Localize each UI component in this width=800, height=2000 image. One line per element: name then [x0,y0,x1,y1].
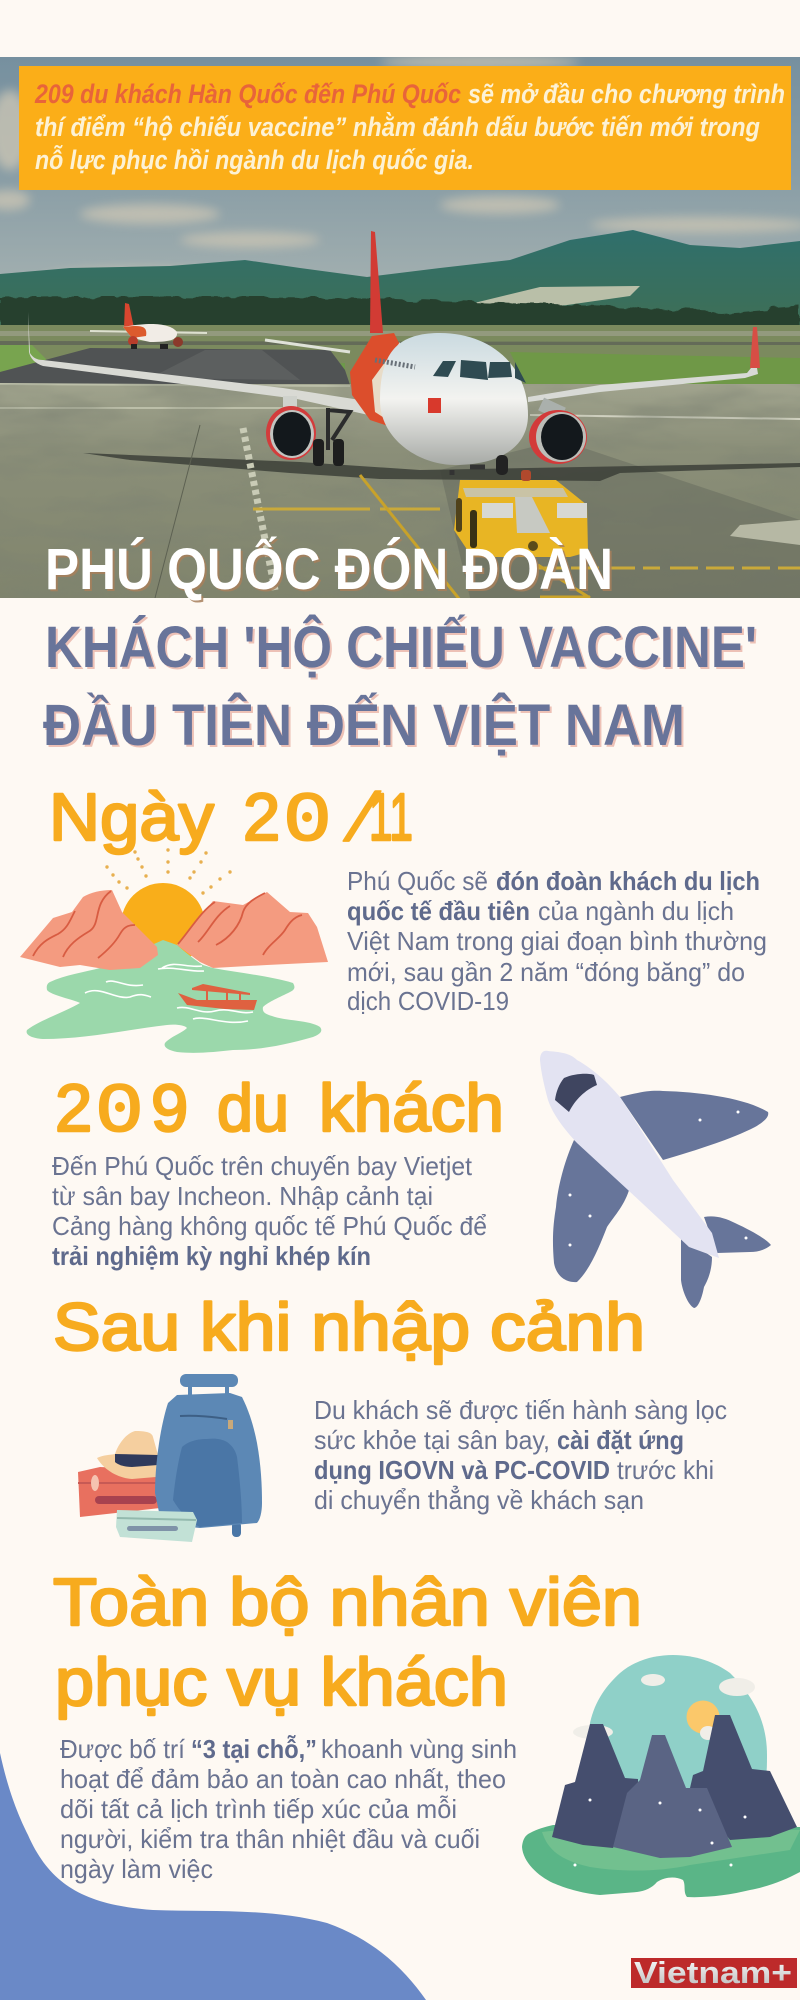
clouds [573,1674,755,1740]
title: ĐẦU TIÊN ĐẾN VIỆT NAM [43,693,685,758]
mountain creases [33,891,302,958]
sun rays [105,848,232,895]
text block: Sau khi nhập cảnh: cài đặt ứng [557,1425,684,1455]
heading: Ngày 20/11 [49,779,413,855]
water [27,940,321,1053]
red suitcase [78,1467,160,1517]
text block: Ngày 20/11: quốc tế đầu tiên [347,896,530,926]
cockpit window [555,1074,597,1112]
text block: Sau khi nhập cảnh: di chuyển thẳng về khách sạn [314,1484,644,1515]
engine left [266,396,316,460]
text block: Toàn bộ nhân viên: người, kiểm tra thân nhiệt đầu và cuối [60,1824,480,1854]
text block: Sau khi nhập cảnh: trước khi [617,1455,714,1485]
text block: Sau khi nhập cảnh: sức khỏe tại sân bay, [314,1425,550,1455]
text block: Toàn bộ nhân viên [60,1734,517,1884]
text block: Toàn bộ nhân viên: “3 tại chỗ,” [191,1734,317,1764]
icon: airplane illustration [540,1051,771,1308]
text block: Sau khi nhập cảnh: dụng IGOVN và PC-COVID [314,1455,610,1485]
photo: airplane on the Phu Quoc runway [0,55,800,600]
text block: Sau khi nhập cảnh [314,1395,727,1515]
right peak [690,1715,797,1840]
heading: Ngày 20/11: 11 [369,780,413,855]
heading: Ngày 20/11: / [339,779,386,855]
stars [568,1110,748,1246]
text block: Ngày 20/11: Phú Quốc sẽ [347,866,488,896]
base highlight [542,1825,800,1871]
text block: 209 du khách: Đến Phú Quốc trên chuyến bay Vietjet [52,1151,473,1181]
text block: Toàn bộ nhân viên: dõi tất cả lịch trình tiếp xúc của mỗi [60,1794,457,1824]
right wing [620,1091,768,1160]
text block: 209 du khách: Cảng hàng không quốc tế Phú Quốc để [52,1211,487,1241]
heading: 209 du khách: 2 [55,1071,92,1146]
landing gear [313,408,350,466]
small green case [116,1510,197,1542]
sun [686,1700,720,1734]
heading: Toàn bộ nhân viên phục vụ khách [53,1565,642,1720]
left tail [681,1235,712,1308]
text block: Toàn bộ nhân viên: ngày làm việc [60,1854,213,1884]
left mountain [20,890,158,970]
blue decorative blob [0,1753,426,2000]
heading: Sau khi nhập cảnh: Sau khi nhập cảnh [53,1290,645,1365]
waves [85,964,253,1022]
heading: Ngày 20/11: 0 [285,779,330,854]
callout box: introduction: 209 du khách Hàn Quốc đến Phú Quốc [34,79,461,109]
heading: 209 du khách: khách [319,1071,504,1146]
text block: 209 du khách: từ sân bay Incheon. Nhập cảnh tại [52,1181,433,1211]
middle peak [613,1735,732,1858]
text block: 209 du khách [52,1151,487,1271]
heading: Ngày 20/11: 2 [243,780,280,855]
heading: Toàn bộ nhân viên phục vụ khách: phục vụ khách [55,1645,508,1720]
title: ĐẦU TIÊN ĐẾN VIỆT NAM [45,695,687,760]
straw hat [97,1431,158,1479]
text block: Toàn bộ nhân viên: hoạt để đảm bảo an toàn cao nhất, theo [60,1764,506,1794]
title [43,537,759,760]
blue suitcase [155,1374,262,1537]
right mountain [177,892,328,968]
text block: Ngày 20/11: dịch COVID-19 [347,986,509,1016]
heading: 209 du khách: 0 [97,1070,142,1145]
sky egg [590,1655,767,1815]
text block: Toàn bộ nhân viên: khoanh vùng sinh [321,1734,517,1764]
icon: luggage [78,1374,262,1542]
text block: Sau khi nhập cảnh: Du khách sẽ được tiến hành sàng lọc [314,1395,727,1425]
sun [121,883,205,967]
stars [574,1798,746,1866]
text block: Ngày 20/11: của ngành du lịch [538,896,734,926]
yellow towing tractor [454,470,588,557]
heading: 209 du khách: 9 [151,1071,188,1146]
engine right [529,398,587,464]
left wing [553,1140,630,1282]
callout box: introduction: nỗ lực phục hồi ngành du lịch quốc gia. [35,144,474,175]
title: PHÚ QUỐC ĐÓN ĐOÀN [45,537,613,602]
title: PHÚ QUỐC ĐÓN ĐOÀN [47,539,615,604]
left peak [552,1724,638,1848]
text block: Ngày 20/11: đón đoàn khách du lịch [496,866,760,896]
heading: Toàn bộ nhân viên phục vụ khách: Toàn bộ nhân viên [53,1565,642,1640]
icon: mountains illustration [522,1655,800,1897]
boat [178,984,257,1010]
fuselage [540,1051,719,1258]
heading: Ngày 20/11: Ngày [49,780,215,855]
text block: 209 du khách: trải nghiệm kỳ nghỉ khép kín [52,1241,371,1271]
right tail [704,1216,771,1253]
green base [522,1825,800,1897]
heading: 209 du khách [55,1070,504,1146]
text block: Ngày 20/11: mới, sau gần 2 năm “đóng băng” do [347,957,745,987]
text block: Toàn bộ nhân viên: Được bố trí [60,1734,186,1764]
distant plane [90,303,207,349]
callout box: introduction [19,66,791,190]
text block: Ngày 20/11 [347,866,767,1016]
main plane [28,231,760,475]
text block: Ngày 20/11: Việt Nam trong giai đoạn bình thường [347,926,767,956]
logo: Vietnam+: Vietnam+ [634,1955,792,1990]
heading: 209 du khách: du [217,1071,289,1146]
icon: sunrise over mountains and boat [20,848,328,1053]
